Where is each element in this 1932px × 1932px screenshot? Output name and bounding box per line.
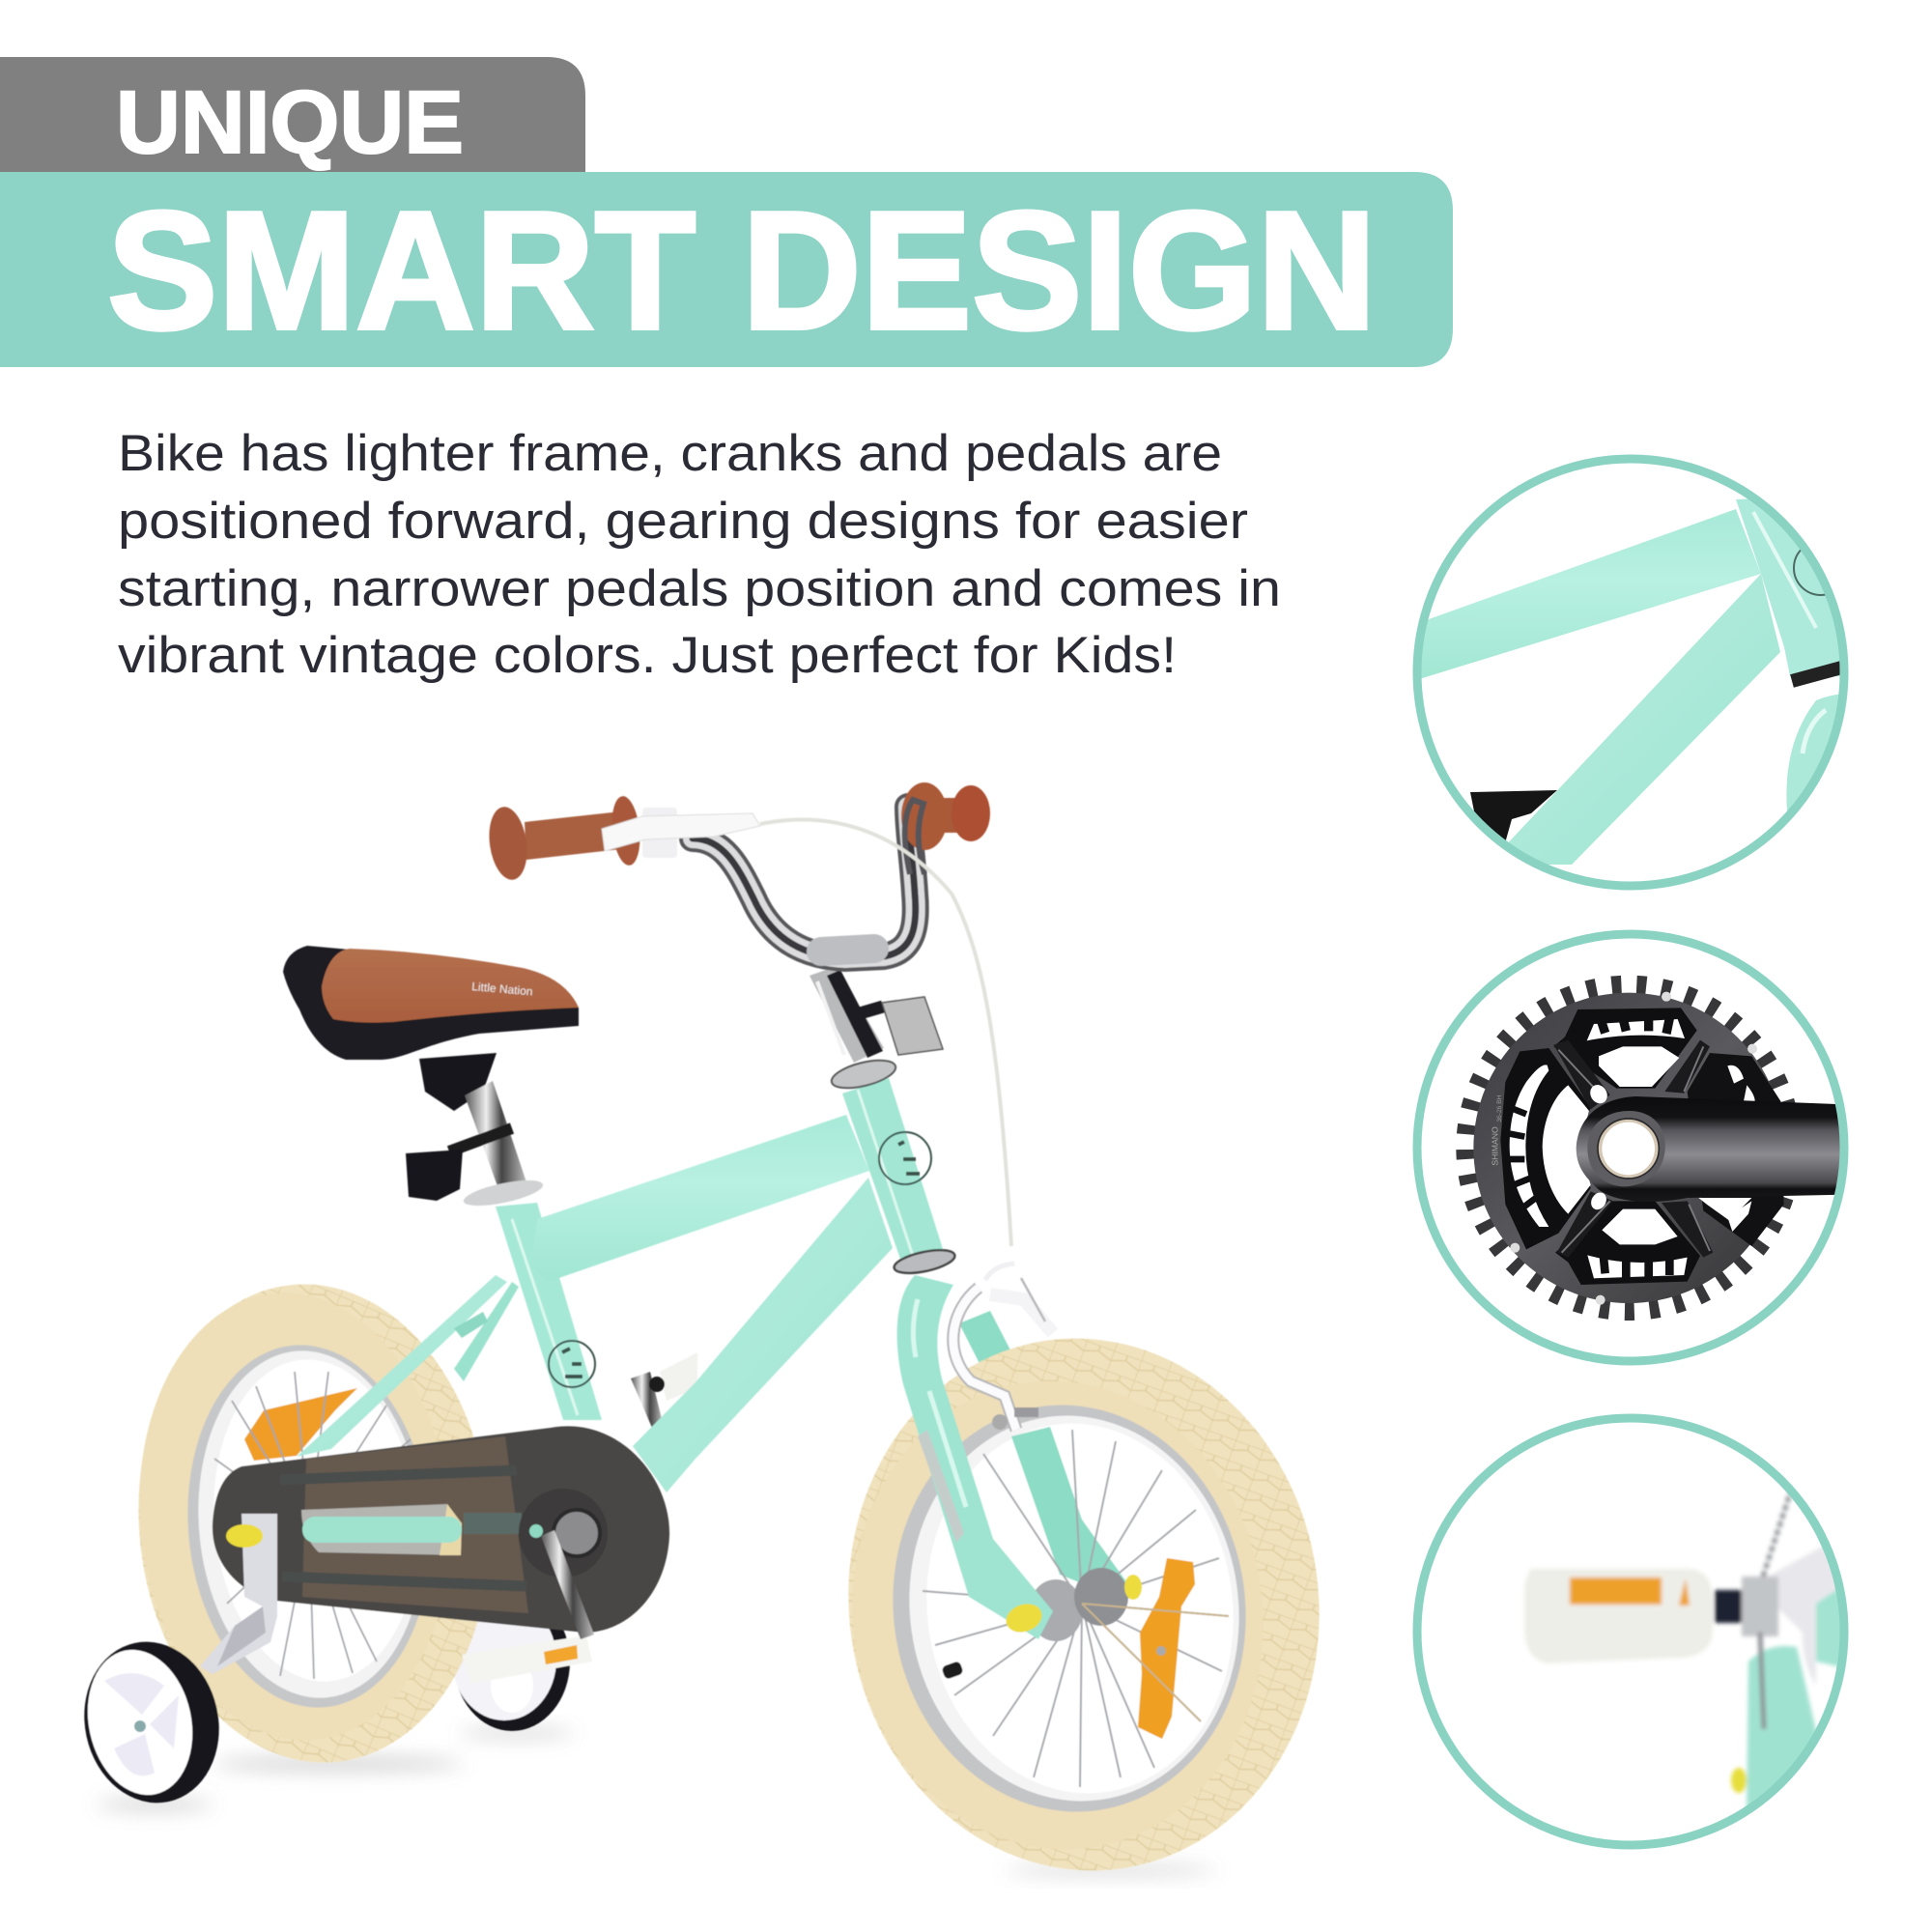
description text: vibrant vintage colors. Just perfect for Kids! (118, 627, 1177, 684)
description text: Bike has lighter frame, cranks and pedals are (118, 425, 1222, 482)
saddle (283, 946, 579, 1111)
front reflector bracket (850, 997, 943, 1055)
header banner: UNIQUE: UNIQUE (116, 73, 464, 172)
training wheel bracket (200, 1514, 277, 1674)
front fork blade (897, 1275, 1142, 1639)
brake caliper (953, 1288, 1038, 1430)
front spokes and hub (923, 1430, 1229, 1787)
detail circle: chainring and crank (1417, 934, 1845, 1361)
fork rear blade lower (1011, 1427, 1130, 1599)
seat post and collar (406, 1081, 545, 1211)
crank and near pedal (462, 1530, 594, 1684)
saddle: Little Nation (471, 980, 533, 999)
seat tube with badge (496, 1203, 602, 1420)
near training wheel (70, 1629, 234, 1816)
front wheel (814, 1308, 1353, 1901)
handlebar loop (905, 800, 924, 874)
brake lever (602, 808, 760, 858)
brake cable (760, 819, 1011, 1246)
detail circle: chainring and crank: SHIMANO (1491, 1126, 1500, 1166)
header banner: UNIQUE (0, 57, 585, 172)
far pedal (631, 1352, 697, 1428)
detail circle: pedal close-up (1417, 1418, 1860, 1845)
description text: positioned forward, gearing designs for easier (118, 493, 1248, 550)
ground shadows (97, 1729, 1217, 1874)
far training wheel (452, 1592, 570, 1731)
handlebar (693, 807, 916, 958)
down tube (633, 1178, 893, 1492)
header banner: SMART DESIGN: SMART DESIGN (107, 176, 1377, 364)
bicycle illustration (70, 782, 1353, 1901)
detail circle: frame close-up (1391, 459, 1864, 886)
stem and headset (810, 966, 898, 1094)
chain guard (213, 1426, 669, 1633)
front brake arm (985, 1264, 1053, 1333)
description text (118, 425, 1281, 684)
fork rear blade upper (959, 1311, 1050, 1427)
description text: starting, narrower pedals position and comes in (118, 560, 1281, 617)
right grip (901, 782, 990, 850)
rear frame stays (297, 1275, 519, 1457)
front reflector (1082, 1558, 1229, 1739)
rear wheel (119, 1269, 509, 1777)
head tube with badge (842, 1078, 956, 1277)
detail circle: chainring and crank: 36-26 BH (1496, 1094, 1503, 1122)
top tube (531, 1115, 869, 1282)
left grip (485, 795, 643, 882)
